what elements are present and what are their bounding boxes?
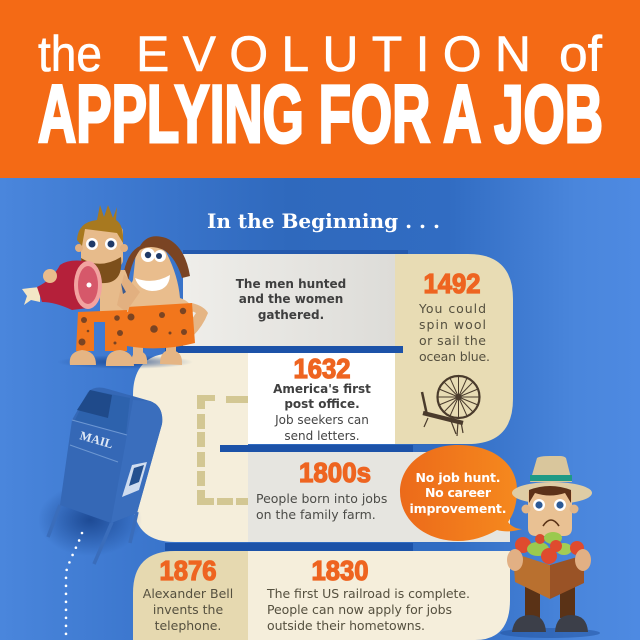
legs [48, 505, 137, 564]
timeline panels [133, 250, 513, 640]
shoes [512, 615, 588, 632]
text: 1492: You could [418, 301, 486, 316]
text: 1632: send letters. [284, 429, 360, 443]
cave woman [123, 236, 208, 365]
panel: hunted and gathered [183, 254, 395, 346]
top rule [183, 250, 408, 254]
body [60, 388, 162, 523]
mailbox shadow [38, 484, 142, 556]
crate [513, 553, 550, 599]
text: 1876: telephone. [155, 618, 221, 633]
text: hunted: The men hunted [236, 277, 346, 291]
title line 1: EVOLUTION [136, 26, 531, 82]
legs [525, 585, 540, 618]
fruit [515, 532, 584, 564]
panel: 1876 [133, 551, 248, 640]
text: 1800s: 1800s [299, 457, 371, 488]
text: 1830: outside their hometowns. [267, 618, 425, 633]
callout: no job hunt: improvement. [410, 501, 506, 516]
ham [22, 261, 102, 310]
header banner [0, 0, 640, 178]
caveman [70, 205, 140, 366]
text: 1876: Alexander Bell [143, 586, 233, 601]
text: 1830: The first US railroad is complete. [266, 586, 470, 601]
title line 1: of [559, 26, 602, 82]
text: 1876: 1876 [160, 555, 216, 586]
text: 1830: 1830 [312, 555, 368, 586]
front seam [70, 420, 127, 462]
section heading: In the Beginning . . . [207, 209, 440, 233]
text: 1876: invents the [153, 602, 223, 617]
hands [507, 549, 523, 571]
text: 1800s: People born into jobs [256, 491, 387, 506]
callout: no job hunt: No job hunt. [416, 470, 500, 485]
dotted path [66, 533, 82, 640]
divider bars [165, 346, 413, 551]
text: 1492 [418, 268, 490, 364]
callout: no job hunt [400, 445, 522, 541]
label MAIL: MAIL [78, 428, 115, 451]
icon: mailbox [38, 388, 162, 564]
hat [512, 482, 592, 504]
head [528, 487, 572, 536]
text: hunted: gathered. [258, 308, 324, 322]
shadow [500, 628, 600, 638]
text: 1800s [256, 457, 387, 522]
text: 1830: People can now apply for jobs [267, 602, 452, 617]
panel: 1492 [395, 254, 513, 444]
text: hunted [236, 277, 346, 322]
text: hunted: and the women [239, 292, 343, 306]
ground shadow [57, 355, 193, 369]
dashed route [197, 395, 248, 505]
title line 1: the [38, 26, 102, 82]
text: 1632: America's first [273, 382, 371, 396]
icon: cave couple [22, 205, 208, 369]
background [0, 178, 640, 640]
postal badge [122, 462, 147, 497]
text: 1632: Job seekers can [274, 413, 369, 427]
text: 1632: post office. [284, 397, 360, 411]
text: 1492: spin wool [419, 317, 486, 332]
slot [75, 390, 130, 434]
text: 1492: 1492 [424, 268, 480, 299]
icon: spinning wheel [422, 376, 480, 436]
text: 1632: 1632 [294, 353, 350, 384]
text: 1492: or sail the [419, 333, 486, 348]
callout: no job hunt: No career [425, 485, 492, 500]
panel: 1632 [248, 353, 395, 444]
panel: 1830 [248, 551, 510, 640]
panel: cream middle [133, 353, 248, 542]
text: 1492: ocean blue. [419, 349, 490, 364]
panel: 1800s [248, 452, 510, 542]
text: 1830 [266, 555, 470, 633]
icon: farmer [500, 456, 600, 638]
text: 1876 [143, 555, 233, 633]
text: 1800s: on the family farm. [256, 507, 376, 522]
text: 1632 [273, 353, 371, 443]
